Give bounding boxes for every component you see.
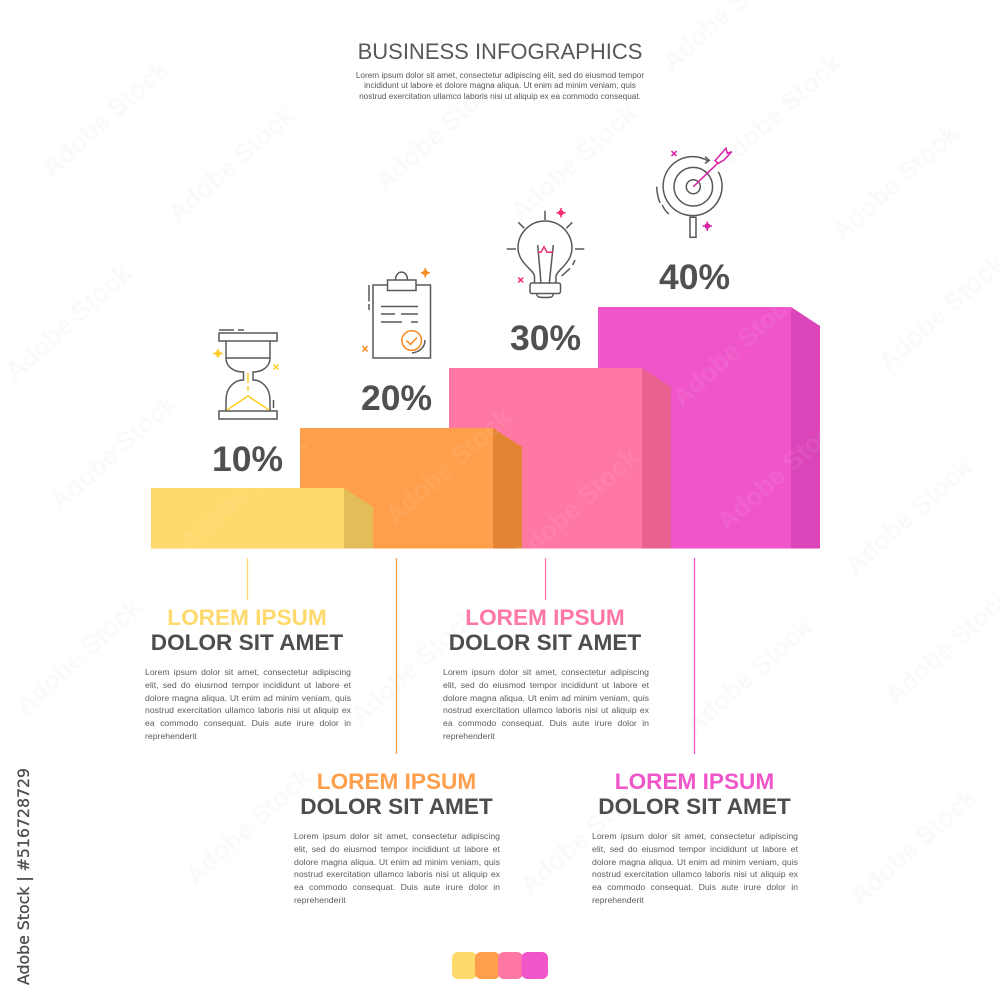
text: Adobe Stock bbox=[826, 117, 965, 246]
text: magenta column: nostrud exercitation ullamco laboris nisi ut aliquip ex bbox=[592, 869, 798, 879]
icon: light bulb bbox=[507, 208, 584, 298]
heading: yellow bbox=[151, 605, 343, 655]
text: Adobe Stock bbox=[504, 97, 643, 226]
text: yellow column: elit, sed do eiusmod tempor incididunt ut labore et bbox=[145, 680, 351, 690]
bar: 10% yellow bbox=[151, 488, 373, 548]
text: yellow column: dolore magna aliqua. Ut enim ad minim veniam, quis bbox=[145, 693, 351, 703]
text: Adobe Stock bbox=[0, 257, 138, 386]
icon: target bbox=[657, 148, 732, 237]
text: orange column bbox=[294, 831, 500, 905]
text: pink column bbox=[443, 667, 649, 741]
text: pink column: elit, sed do eiusmod tempor incididunt ut labore et bbox=[443, 680, 649, 690]
text: yellow column: reprehenderit bbox=[145, 731, 197, 741]
bar: 30% pink bbox=[449, 368, 671, 548]
10% label: 10% bbox=[212, 439, 283, 479]
text: Adobe Stock bbox=[666, 283, 805, 412]
text: yellow column: Lorem ipsum dolor sit amet, consectetur adipiscing bbox=[145, 667, 351, 677]
text: pink column: dolore magna aliqua. Ut enim ad minim veniam, quis bbox=[443, 693, 649, 703]
text: Adobe Stock bbox=[711, 407, 850, 536]
icon: clipboard bbox=[362, 268, 430, 358]
text: Adobe Stock bbox=[379, 401, 518, 530]
text: Adobe Stock bbox=[36, 53, 175, 182]
text: Adobe Stock bbox=[174, 427, 313, 556]
heading: yellow: LOREM IPSUM bbox=[167, 605, 327, 630]
text: yellow column: ea commodo consequat. Duis aute irure dolor in bbox=[145, 718, 351, 728]
text: Adobe Stock bbox=[162, 99, 301, 228]
text: Adobe Stock bbox=[344, 601, 483, 730]
text: orange column: dolore magna aliqua. Ut enim ad minim veniam, quis bbox=[294, 857, 500, 867]
heading: yellow: DOLOR SIT AMET bbox=[151, 630, 343, 655]
title: BUSINESS INFOGRAPHICS bbox=[358, 39, 642, 64]
text: Adobe Stock bbox=[679, 611, 818, 740]
text: magenta column: Lorem ipsum dolor sit amet, consectetur adipiscing bbox=[592, 831, 798, 841]
text: magenta column: dolore magna aliqua. Ut enim ad minim veniam, quis bbox=[592, 857, 798, 867]
text: magenta column: reprehenderit bbox=[592, 895, 644, 905]
text: Adobe Stock bbox=[9, 591, 148, 720]
text: pink column: reprehenderit bbox=[443, 731, 495, 741]
watermark id: Adobe Stock | #516728729 bbox=[14, 768, 33, 985]
text: Adobe Stock bbox=[514, 771, 653, 900]
text: orange column: Lorem ipsum dolor sit amet, consectetur adipiscing bbox=[294, 831, 500, 841]
heading: orange bbox=[300, 769, 493, 819]
intro text: incididunt ut labore et dolore magna aliqua. Ut enim ad minim veniam, quis bbox=[364, 81, 636, 90]
connector line: yellow bbox=[246, 558, 248, 600]
heading: orange: LOREM IPSUM bbox=[317, 769, 476, 794]
text: magenta column bbox=[592, 831, 798, 905]
heading: pink bbox=[449, 605, 641, 655]
intro text: nostrud exercitation ullamco laboris nisi ut aliquip ex ea commodo consequat. bbox=[359, 92, 641, 101]
heading: pink: DOLOR SIT AMET bbox=[449, 630, 641, 655]
intro text bbox=[356, 71, 644, 101]
text: Adobe Stock bbox=[506, 441, 645, 570]
heading: magenta: DOLOR SIT AMET bbox=[598, 794, 791, 819]
30% label: 30% bbox=[510, 318, 581, 358]
text: yellow column: nostrud exercitation ullamco laboris nisi ut aliquip ex bbox=[145, 705, 351, 715]
text: pink column: nostrud exercitation ullamco laboris nisi ut aliquip ex bbox=[443, 705, 649, 715]
40% label: 40% bbox=[659, 257, 730, 297]
connector line: pink bbox=[544, 558, 546, 600]
text: magenta column: elit, sed do eiusmod tempor incididunt ut labore et bbox=[592, 844, 798, 854]
text: orange column: elit, sed do eiusmod tempor incididunt ut labore et bbox=[294, 844, 500, 854]
text: pink column: ea commodo consequat. Duis aute irure dolor in bbox=[443, 718, 649, 728]
heading: pink: LOREM IPSUM bbox=[465, 605, 625, 630]
text: magenta column: ea commodo consequat. Duis aute irure dolor in bbox=[592, 882, 798, 892]
20% label: 20% bbox=[361, 378, 432, 418]
palette swatches bbox=[452, 952, 548, 979]
heading: magenta bbox=[598, 769, 791, 819]
text: yellow column bbox=[145, 667, 351, 741]
intro text: Lorem ipsum dolor sit amet, consectetur adipiscing elit, sed do eiusmod tempor bbox=[356, 71, 644, 80]
text: Adobe Stock bbox=[179, 761, 318, 890]
text: Adobe Stock bbox=[839, 451, 978, 580]
connector line: orange bbox=[396, 558, 398, 754]
heading: magenta: LOREM IPSUM bbox=[615, 769, 774, 794]
connector line: magenta bbox=[694, 558, 696, 754]
icon: hourglass bbox=[213, 330, 278, 419]
text: Adobe Stock bbox=[369, 67, 508, 196]
text: pink column: Lorem ipsum dolor sit amet, consectetur adipiscing bbox=[443, 667, 649, 677]
text: Adobe Stock bbox=[709, 47, 848, 176]
bar: 40% magenta bbox=[598, 307, 820, 548]
heading: orange: DOLOR SIT AMET bbox=[300, 794, 493, 819]
text: Adobe Stock bbox=[844, 781, 983, 910]
text: Adobe Stock bbox=[44, 387, 183, 516]
text: orange column: nostrud exercitation ullamco laboris nisi ut aliquip ex bbox=[294, 869, 500, 879]
text: orange column: ea commodo consequat. Duis aute irure dolor in bbox=[294, 882, 500, 892]
text: orange column: reprehenderit bbox=[294, 895, 346, 905]
bar: 20% orange bbox=[300, 428, 522, 548]
